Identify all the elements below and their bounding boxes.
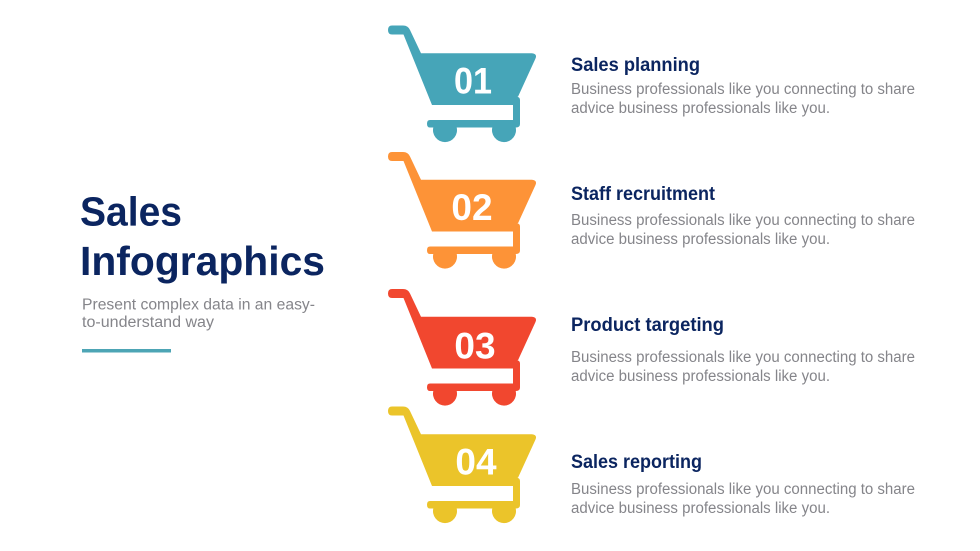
cart 01: 01 (454, 60, 492, 102)
cart 02 (388, 152, 536, 269)
text block: sales reporting: Business professionals like you connecting to share (571, 481, 915, 498)
text block: sales planning: advice business professionals like you. (571, 100, 830, 117)
text block: sales reporting: advice business professionals like you. (571, 500, 830, 517)
text block: product targeting: advice business professionals like you. (571, 368, 830, 385)
accent underline (82, 349, 171, 352)
text block: sales planning: Business professionals like you connecting to share (571, 81, 915, 98)
text block: product targeting: Business professionals like you connecting to share (571, 349, 915, 366)
cart 04 (388, 406, 536, 523)
subtitle: Present complex data in an easy- (82, 296, 315, 314)
cart 01 (388, 26, 536, 142)
title: Sales (80, 188, 182, 234)
text block: sales planning (571, 54, 915, 117)
cart 03 (388, 289, 536, 406)
text block: staff recruitment: Staff recruitment (571, 183, 715, 205)
subtitle (82, 296, 315, 331)
title (80, 188, 325, 284)
text block: sales reporting: Sales reporting (571, 451, 702, 473)
text block: sales reporting (571, 451, 915, 517)
text block: product targeting: Product targeting (571, 314, 724, 336)
cart 02: 02 (451, 187, 493, 228)
text block: sales planning: Sales planning (571, 54, 700, 76)
title: Infographics (80, 238, 325, 284)
cart 04: 04 (455, 442, 497, 482)
cart 03: 03 (454, 326, 496, 366)
text block: product targeting (571, 314, 915, 385)
text block: staff recruitment (571, 183, 915, 248)
text block: staff recruitment: Business professionals like you connecting to share (571, 212, 915, 229)
text block: staff recruitment: advice business professionals like you. (571, 231, 830, 248)
subtitle: to-understand way (82, 314, 214, 331)
